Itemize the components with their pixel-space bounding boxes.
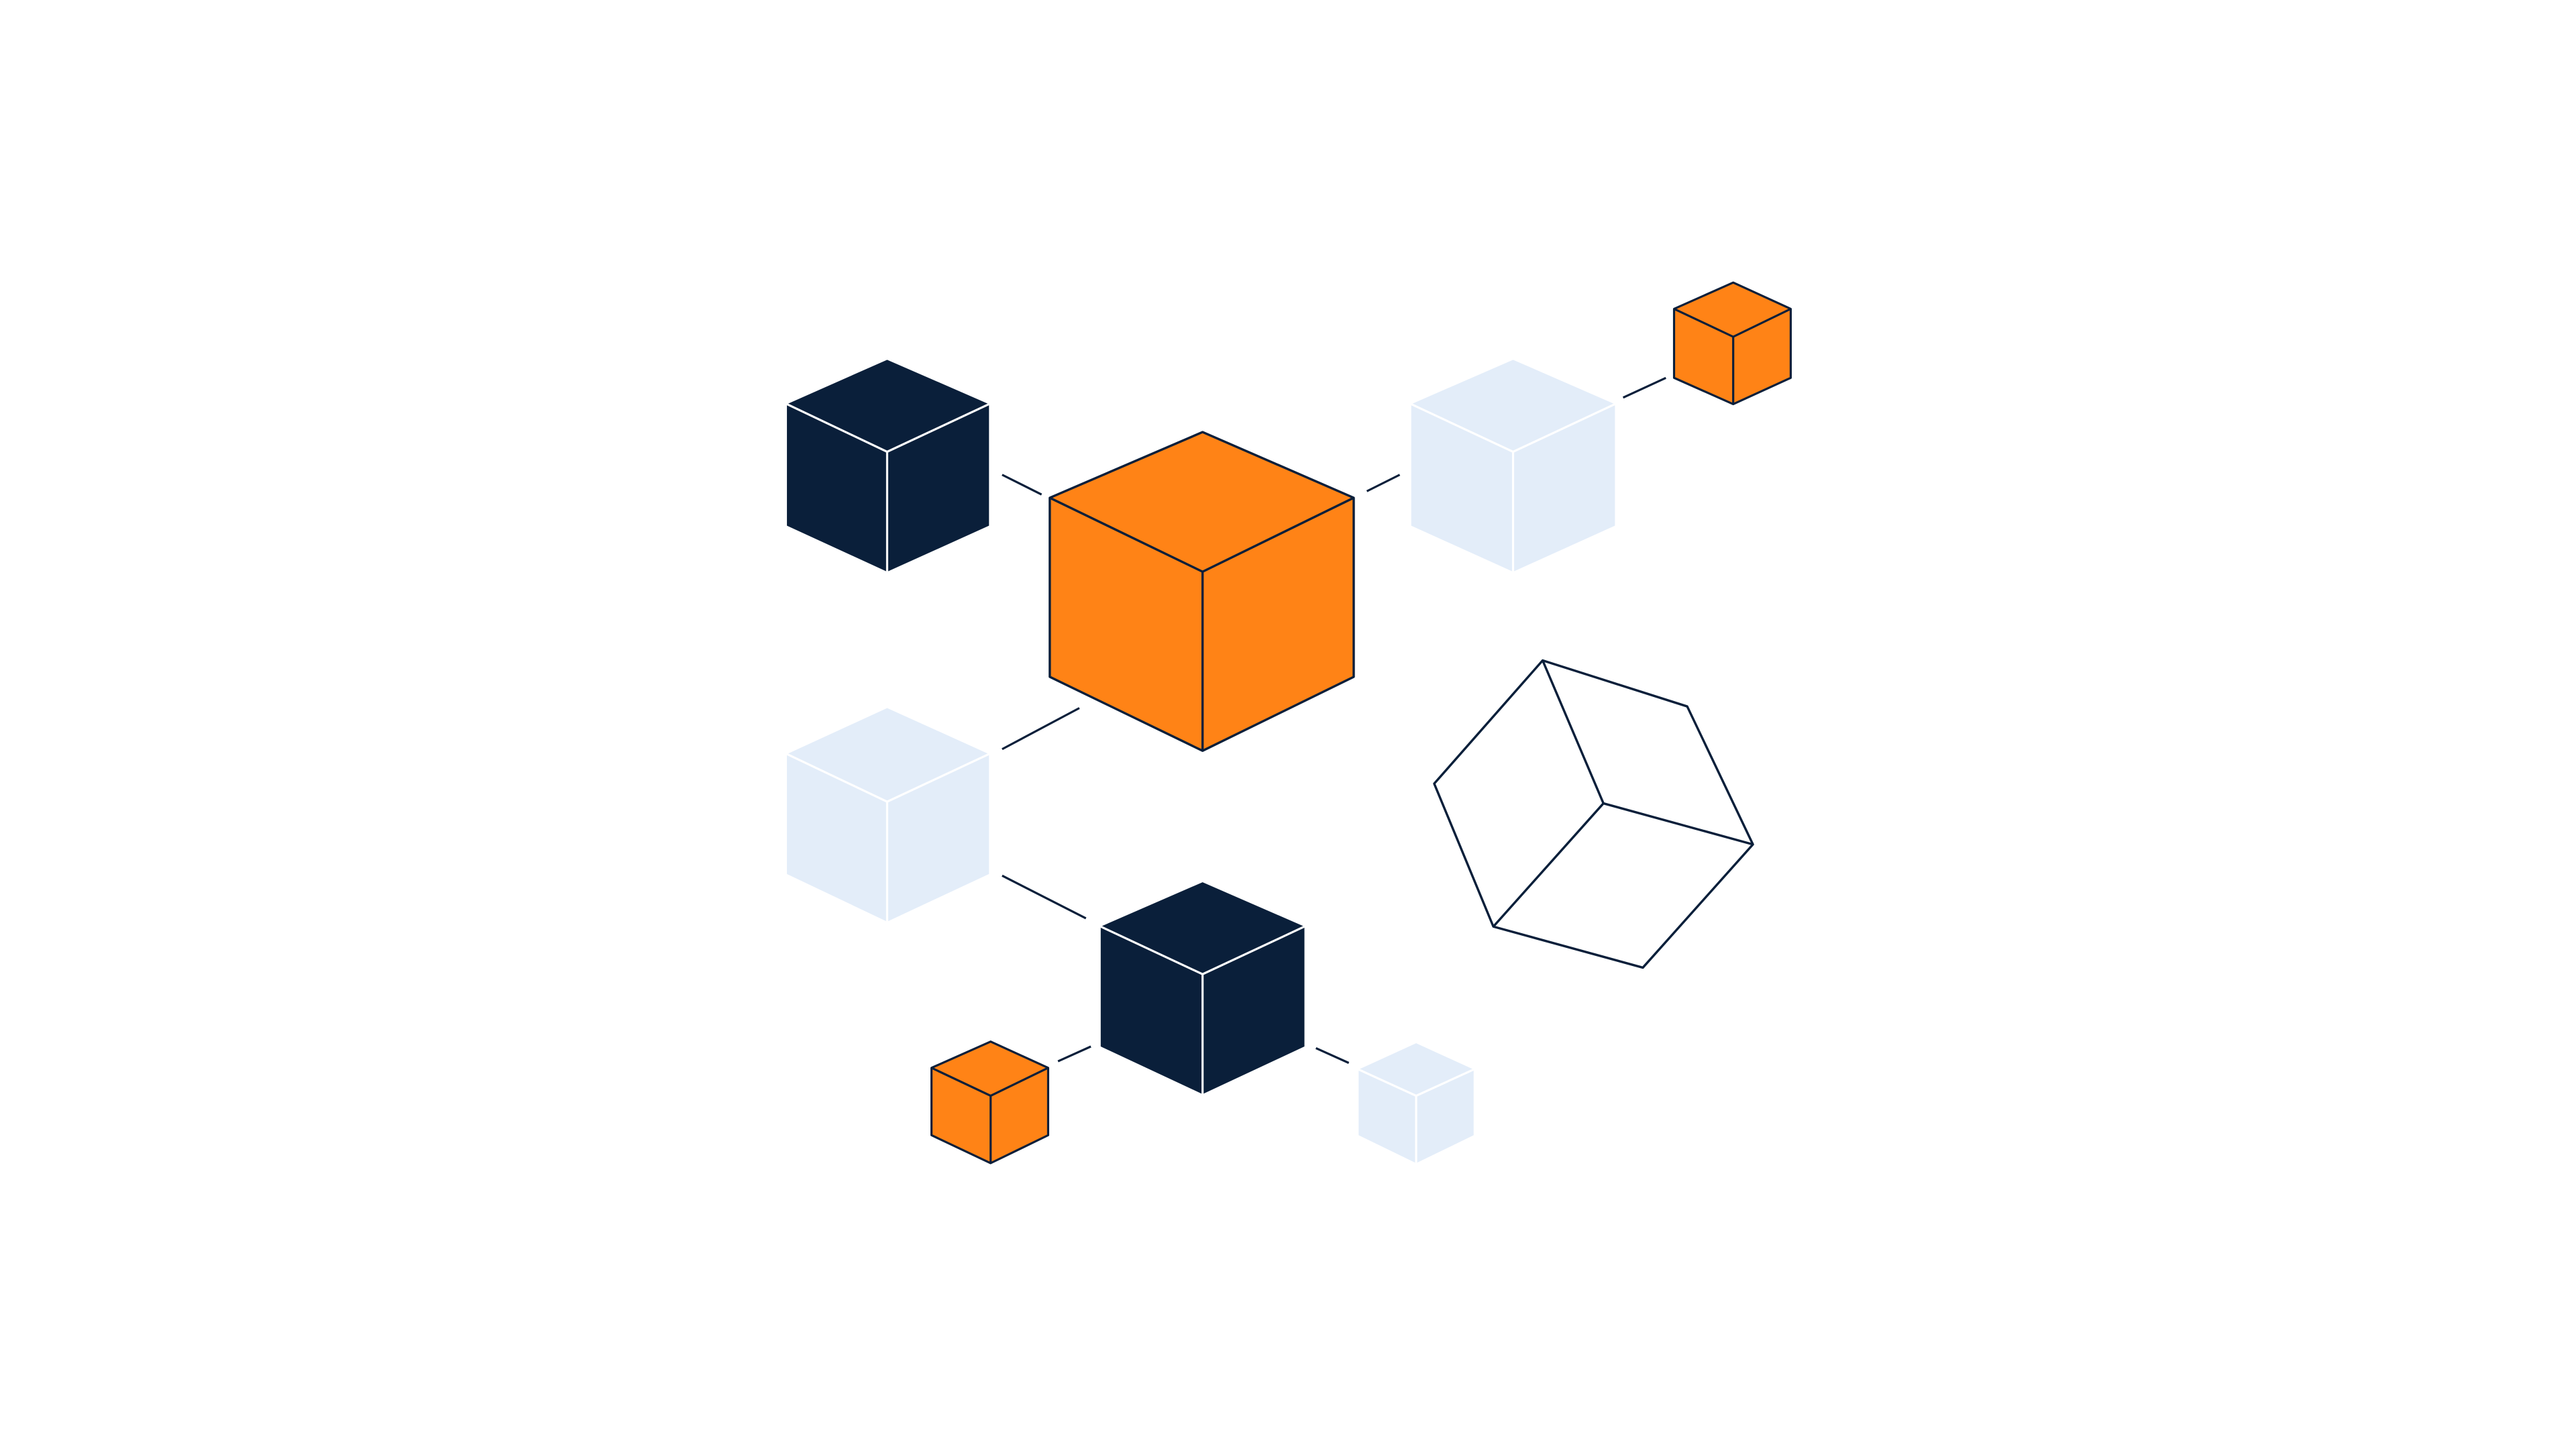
cube: small orange bottom (932, 1042, 1048, 1163)
cube: navy bottom (1101, 882, 1304, 1094)
cube: wireframe outline (1434, 660, 1753, 967)
cube: small light bottom (1358, 1043, 1474, 1163)
cube: small orange top-right (1674, 282, 1790, 404)
cube: light top-right (1411, 360, 1615, 572)
cube: navy top-left (787, 360, 989, 572)
cube: light left-middle (787, 708, 989, 922)
cube: large orange center (1050, 432, 1354, 751)
connectors (1002, 378, 1666, 1063)
